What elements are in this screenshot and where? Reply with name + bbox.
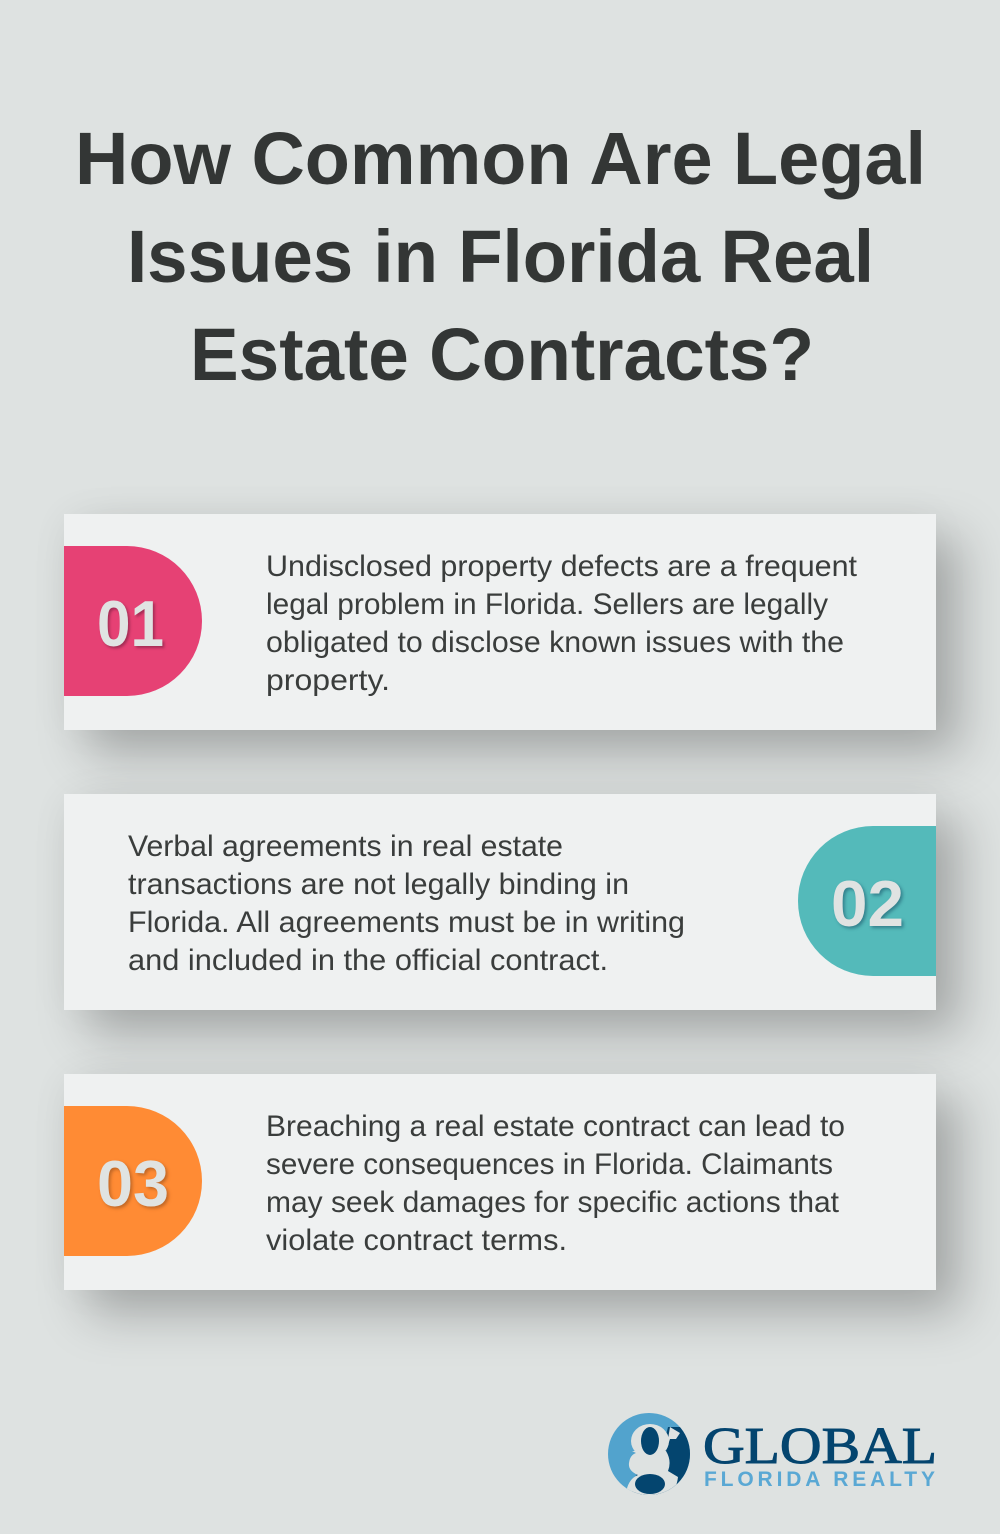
text: item 01: legal problem in Florida. Sellers are legally (266, 588, 828, 621)
title: How Common Are Legal (75, 117, 926, 200)
title: Estate Contracts? (190, 313, 814, 396)
text: item 02: and included in the official contract. (128, 944, 608, 977)
text: item 02: Florida. All agreements must be in writing (128, 906, 685, 939)
text: item 01: obligated to disclose known issues with the (266, 626, 844, 659)
text: item 03: Breaching a real estate contract can lead to (266, 1110, 845, 1143)
badge 02 (798, 826, 936, 976)
text: item 01 (266, 550, 858, 697)
icon: g globe (608, 1413, 690, 1495)
text: item 03: violate contract terms. (266, 1224, 567, 1257)
wordmark: FLORIDA REALTY (704, 1468, 935, 1491)
text: item 02: Verbal agreements in real estate (128, 830, 563, 863)
text: item 02: transactions are not legally binding in (128, 868, 629, 901)
text: item 01: Undisclosed property defects are a frequent (266, 550, 858, 583)
title (75, 117, 926, 396)
panel: item 01 (64, 514, 936, 730)
badge 01: 01 (97, 587, 164, 660)
badge 03: 03 (97, 1147, 169, 1220)
badge 01 (64, 546, 202, 696)
text: item 03: severe consequences in Florida. Claimants (266, 1148, 833, 1181)
title: Issues in Florida Real (127, 215, 874, 298)
text: item 03: may seek damages for specific actions that (266, 1186, 840, 1219)
text: item 03 (266, 1110, 845, 1257)
badge 03 (64, 1106, 202, 1256)
text: item 02 (128, 830, 685, 977)
panel: item 03 (64, 1074, 936, 1290)
logo: Global Florida Realty (608, 1413, 937, 1495)
badge 02: 02 (831, 867, 904, 940)
panel: item 02 (64, 794, 936, 1010)
text: item 01: property. (266, 664, 390, 697)
wordmark: GLOBAL (703, 1418, 937, 1475)
